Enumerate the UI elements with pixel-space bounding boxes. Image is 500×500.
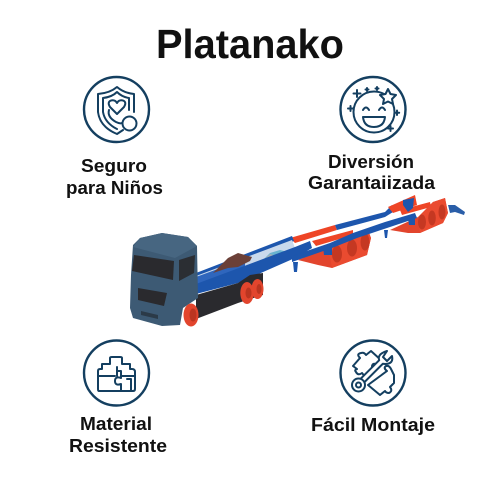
brown toy car [213, 253, 252, 273]
rear wheels [240, 282, 254, 304]
label: Seguro para Niños: Seguro [81, 156, 147, 176]
label: Diversión Garantaiizada: Diversión [328, 152, 414, 172]
label: Material Resistente [69, 414, 167, 456]
rear red sections and far rail [290, 225, 337, 243]
icon: material toolbox puzzle [84, 340, 149, 406]
label: Material Resistente: Material [80, 414, 152, 434]
extended ramp track [292, 198, 465, 272]
deck floor [196, 240, 295, 285]
lower blue rail [292, 213, 417, 262]
icon: smiling face with stars [340, 77, 406, 142]
blue clips and posts [293, 198, 415, 272]
label: Diversión Garantaiizada: Garantaiizada [308, 173, 436, 193]
cab grille [138, 288, 167, 306]
middle red rail [312, 230, 353, 246]
icon: safety shield with heart [84, 77, 149, 142]
truck toy [130, 195, 431, 326]
cab windshield [132, 255, 174, 280]
label: Fácil Montaje: Fácil Montaje [311, 415, 435, 435]
rear red trestle [390, 198, 448, 233]
label: Seguro para Niños: para Niños [66, 178, 163, 198]
chassis [196, 273, 263, 319]
light blue toy car [260, 250, 292, 264]
label: Diversión Garantaiizada [308, 152, 436, 193]
label: Seguro para Niños [66, 156, 163, 198]
front red trestle [298, 230, 371, 268]
truck upper deck rail [196, 236, 294, 279]
icon: wrench and puzzle pieces [340, 340, 406, 406]
front wheel [184, 304, 198, 326]
end clip [448, 205, 465, 215]
title: Platanako [156, 21, 344, 67]
label: Material Resistente: Resistente [69, 436, 167, 456]
cab [130, 233, 198, 326]
cab side window [179, 255, 195, 281]
truck lower deck rail [196, 241, 312, 294]
